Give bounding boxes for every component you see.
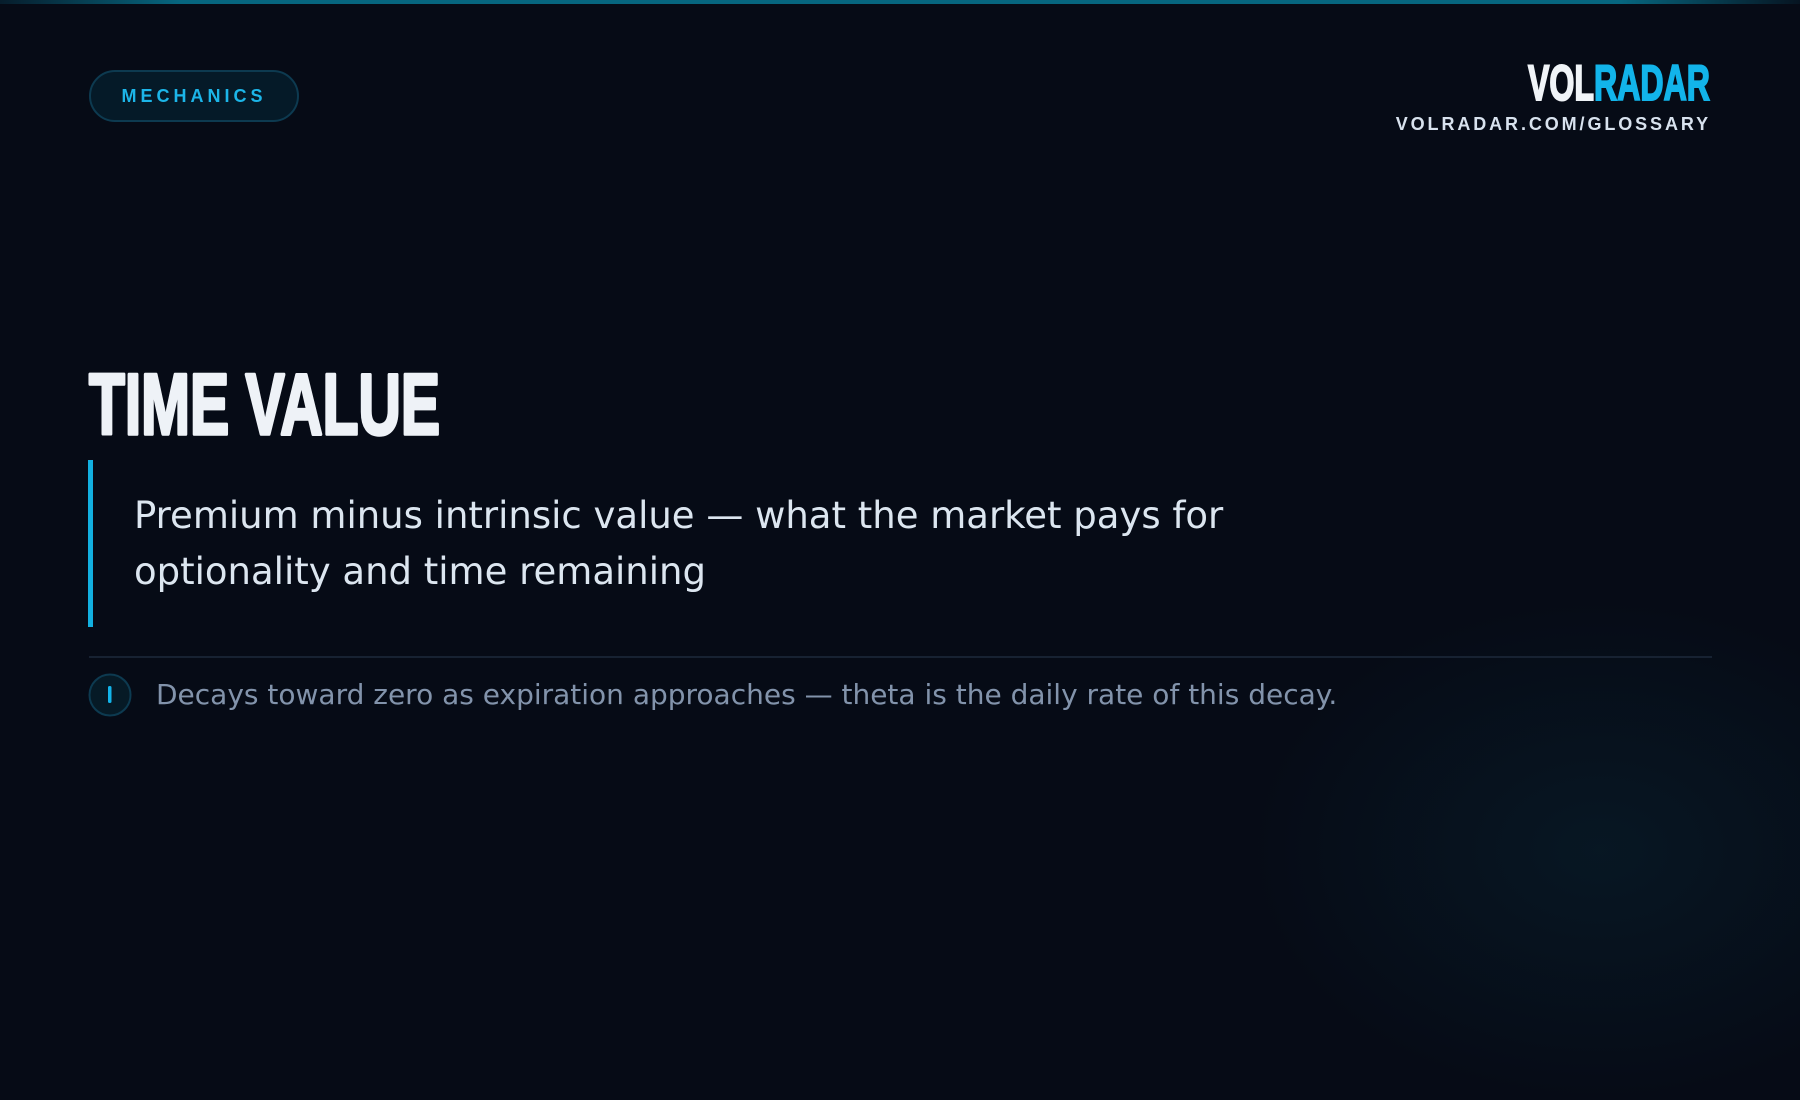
accent bar	[88, 460, 93, 627]
definition text	[134, 494, 1224, 593]
badge: category	[89, 70, 299, 122]
badge: category: MECHANICS	[121, 86, 266, 106]
definition text: optionality and time remaining	[134, 550, 706, 593]
url: VOLRADAR.COM/GLOSSARY	[1396, 114, 1711, 134]
definition text: Premium minus intrinsic value — what the market pays for	[134, 494, 1223, 537]
icon: info	[88, 674, 132, 716]
note text: Decays toward zero as expiration approaches — theta is the daily rate of this decay.	[156, 678, 1337, 711]
